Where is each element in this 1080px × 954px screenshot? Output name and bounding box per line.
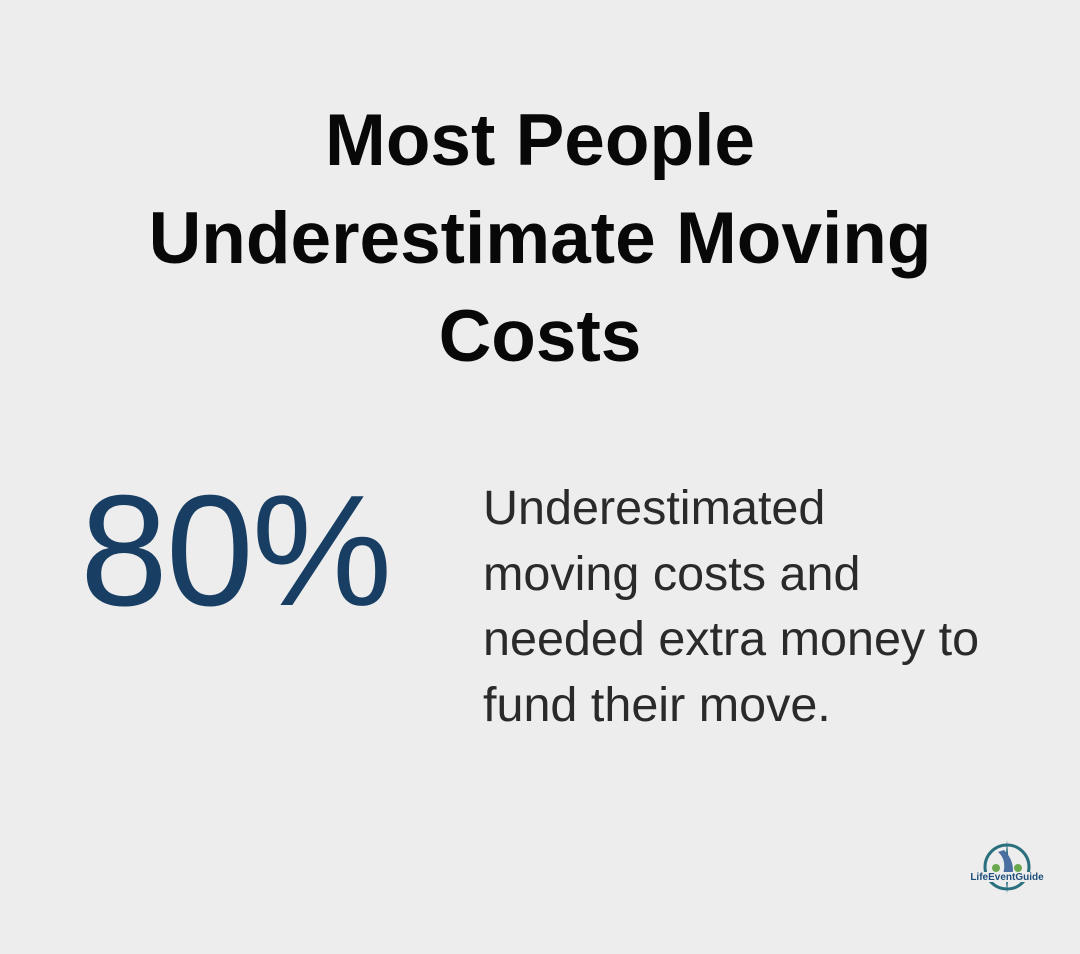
description text: fund their move. bbox=[483, 678, 831, 732]
description text bbox=[483, 481, 979, 732]
logo: LifeEventGuide bbox=[970, 840, 1044, 894]
title bbox=[149, 100, 931, 377]
title: Underestimate Moving bbox=[149, 198, 931, 279]
description text: Underestimated bbox=[483, 481, 825, 535]
description text: moving costs and bbox=[483, 546, 860, 600]
logo: LifeEventGuide: LifeEventGuide bbox=[970, 872, 1044, 883]
statistic: 80%: 80% bbox=[80, 463, 390, 639]
title: Costs bbox=[439, 296, 641, 377]
description text: needed extra money to bbox=[483, 612, 979, 666]
title: Most People bbox=[325, 100, 755, 181]
